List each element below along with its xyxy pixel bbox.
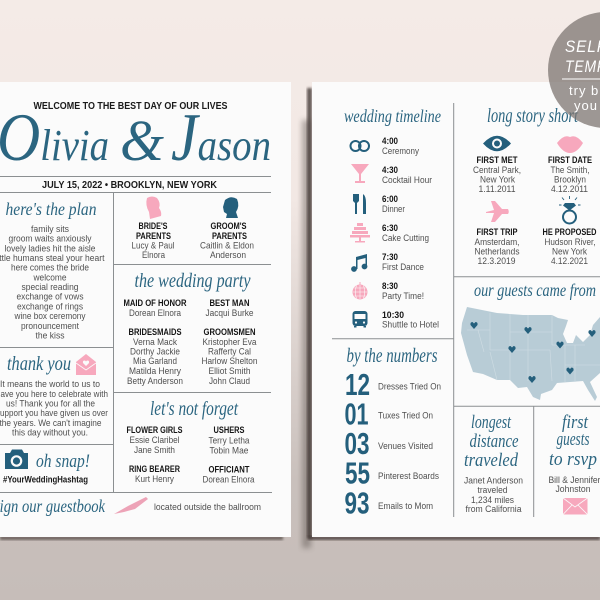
- icon: shuttle bus: [352, 311, 368, 328]
- panel: long story short: 4.12.2021: [551, 256, 588, 267]
- badge: self edit template: try b: [569, 83, 599, 98]
- panel: longest distance traveled: traveled: [478, 485, 508, 496]
- panel: left page: [0, 82, 291, 537]
- panel: by the numbers: [344, 345, 441, 520]
- panel: long story short: FIRST MET: [476, 155, 518, 166]
- panel: let's not forget: Kurt Henry: [135, 474, 174, 485]
- map: United States: [461, 307, 600, 401]
- panel: here's the plan: exchange of vows: [16, 292, 84, 303]
- panel: the wedding party: BRIDESMAIDS: [128, 327, 182, 338]
- panel: long story short: FIRST TRIP: [476, 227, 518, 238]
- panel: parents: Elnora: [142, 250, 166, 261]
- icon: fork and knife: [353, 194, 366, 214]
- panel: first guests to rsvp: to rsvp: [549, 449, 597, 470]
- icon: lips: [557, 136, 583, 153]
- panel: long story short: New York: [552, 246, 587, 258]
- panel: our guests came from: [461, 280, 600, 401]
- panel: by the numbers: 93: [344, 486, 370, 520]
- panel: parents: BRIDE'S: [138, 221, 168, 232]
- panel: thank you: this day without you.: [12, 428, 88, 438]
- panel: right page: [312, 82, 600, 537]
- panel: long story short: [473, 105, 597, 267]
- panel: here's the plan: welcome: [33, 272, 66, 283]
- panel: thank you: [0, 353, 109, 438]
- icon: pink envelope with heart: [76, 354, 96, 375]
- icon: diamond ring: [559, 196, 580, 224]
- panel: wedding timeline: First Dance: [382, 262, 424, 273]
- panel: the wedding party: Mia Garland: [133, 356, 177, 367]
- panel: wedding timeline: 8:30: [382, 281, 398, 292]
- icon: groom silhouette: [223, 197, 238, 218]
- panel: let's not forget: Terry Letha: [208, 436, 250, 446]
- panel: oh snap: oh snap!: [36, 451, 90, 472]
- panel: long story short: 1.11.2011: [478, 184, 516, 195]
- panel: first guests to rsvp: [548, 412, 600, 514]
- badge: self edit template: you: [574, 98, 598, 113]
- panel: the wedding party: Betty Anderson: [127, 376, 183, 387]
- page shadows: [0, 88, 600, 548]
- panel: let's not forget: FLOWER GIRLS: [126, 425, 183, 436]
- panel: let's not forget: [126, 398, 255, 486]
- panel: the wedding party: Elliot Smith: [208, 366, 250, 377]
- panel: longest distance traveled: Janet Anderson: [464, 476, 523, 486]
- panel: parents: PARENTS: [212, 231, 247, 242]
- panel: long story short: The Smith,: [550, 165, 590, 176]
- panel: long story short: Netherlands: [474, 246, 520, 258]
- panel: wedding timeline: wedding timeline: [344, 106, 441, 126]
- panel: long story short: 4.12.2011: [551, 184, 588, 195]
- panel: longest distance traveled: from California: [466, 504, 522, 515]
- panel: the wedding party: Harlow Shelton: [202, 356, 258, 367]
- panel: the wedding party: Rafferty Cal: [208, 347, 251, 358]
- panel: here's the plan: here comes the bride: [11, 263, 89, 274]
- panel: by the numbers: 01: [344, 396, 368, 432]
- panel: thank you: support you have given us over: [0, 408, 109, 419]
- icon: airplane: [486, 201, 509, 222]
- heading: welcome line: WELCOME TO THE BEST DAY OF OUR LIVES: [34, 100, 228, 112]
- panel: parents: PARENTS: [136, 231, 171, 242]
- icon: pen: [114, 497, 148, 514]
- panel: wedding timeline: Cake Cutting: [382, 233, 429, 244]
- panel: thank you: thank you: [7, 353, 71, 375]
- panel: longest distance traveled: distance: [470, 431, 518, 452]
- icon: cocktail: [351, 164, 369, 183]
- panel: here's the plan: groom waits anxiously: [8, 234, 92, 245]
- panel: let's not forget: OFFICIANT: [208, 464, 250, 476]
- panel: wedding timeline: Shuttle to Hotel: [382, 320, 439, 330]
- panel: the wedding party: Dorthy Jackie: [130, 347, 180, 358]
- panel: the wedding party: Dorean Elnora: [129, 308, 182, 319]
- panel: by the numbers: 55: [345, 456, 370, 490]
- icon: eye: [483, 136, 511, 151]
- panel: the wedding party: [124, 270, 258, 387]
- panel: by the numbers: Venues Visited: [378, 441, 433, 452]
- panel: here's the plan: here's the plan: [6, 199, 96, 219]
- icon: envelope: [563, 498, 588, 514]
- panel: by the numbers: Pinterest Boards: [378, 471, 439, 482]
- panel: by the numbers: 12: [345, 367, 370, 402]
- panel: let's not forget: Jane Smith: [134, 445, 175, 456]
- panel: long story short: 12.3.2019: [478, 256, 516, 267]
- title: couple names: &: [120, 108, 164, 173]
- panel: wedding timeline: Ceremony: [382, 146, 419, 157]
- title: couple names: Jason: [171, 99, 271, 175]
- panel: the wedding party: MAID OF HONOR: [124, 298, 187, 309]
- date and location: JULY 15, 2022 • BROOKLYN, NEW YORK: [42, 180, 217, 191]
- panel: longest distance traveled: longest: [471, 412, 512, 433]
- panel: the wedding party: Jacqui Burke: [206, 308, 254, 319]
- panel: long story short: New York: [480, 174, 515, 186]
- panel: wedding timeline: 4:00: [382, 136, 398, 147]
- panel: long story short: Amsterdam,: [474, 237, 520, 248]
- panel: parents: [132, 196, 254, 261]
- icon: music note: [351, 254, 367, 272]
- panel: thank you: the years. We can't imagine: [0, 418, 102, 429]
- panel: here's the plan: lovely ladies hit the aisle: [4, 243, 96, 254]
- panel: wedding timeline: Dinner: [382, 204, 406, 215]
- panel: the wedding party: the wedding party: [134, 270, 251, 292]
- panel: here's the plan: [0, 199, 105, 341]
- panel: here's the plan: family sits: [31, 224, 69, 235]
- panel: oh snap: [3, 450, 90, 486]
- panel: the wedding party: Kristopher Eva: [202, 337, 257, 348]
- panel: the wedding party: John Claud: [209, 376, 250, 387]
- panel: wedding timeline: 10:30: [382, 310, 404, 321]
- panel: parents: GROOM'S: [210, 221, 247, 232]
- panel: longest distance traveled: traveled: [464, 450, 518, 471]
- panel: parents: Anderson: [210, 250, 246, 261]
- panel: by the numbers: 03: [344, 426, 370, 461]
- icon: cake: [350, 223, 370, 242]
- panel: by the numbers: Dresses Tried On: [378, 382, 441, 393]
- panel: here's the plan: pronouncement: [21, 321, 79, 332]
- panel: thank you: us! Thank you for all the: [6, 398, 95, 410]
- panel: wedding timeline: 6:00: [382, 194, 398, 205]
- panel: parents: Lucy & Paul: [132, 240, 174, 252]
- panel: here's the plan: special reading: [22, 282, 78, 293]
- panel: the wedding party: Verna Mack: [133, 337, 177, 348]
- panel: thank you: have you here to celebrate with: [0, 389, 108, 400]
- panel: oh snap: #YourWeddingHashtag: [3, 474, 88, 486]
- panel: here's the plan: wine box ceremony: [14, 311, 86, 322]
- panel: thank you: It means the world to us to: [0, 379, 100, 390]
- panel: first guests to rsvp: first: [562, 412, 589, 433]
- panel: the wedding party: BEST MAN: [210, 298, 250, 309]
- panel: here's the plan: the kiss: [36, 330, 65, 341]
- icon: rings: [350, 141, 369, 151]
- panel: parents: Caitlin & Eldon: [200, 240, 254, 252]
- panel: let's not forget: Dorean Elnora: [202, 474, 255, 486]
- panel: let's not forget: let's not forget: [150, 398, 238, 420]
- panel: let's not forget: RING BEARER: [129, 464, 180, 475]
- title: couple names: [0, 99, 271, 175]
- badge: self edit template: [548, 12, 600, 128]
- panel: longest distance traveled: [464, 412, 523, 515]
- panel: the wedding party: GROOMSMEN: [204, 327, 256, 338]
- panel: by the numbers: Tuxes Tried On: [378, 410, 433, 422]
- map: heart markers: [470, 322, 596, 383]
- panel: wedding timeline: 6:30: [382, 223, 398, 234]
- panel: long story short: Brooklyn: [554, 174, 586, 186]
- panel: wedding timeline: Party Time!: [382, 291, 424, 302]
- panel: here's the plan: exchange of rings: [17, 301, 83, 312]
- panel: by the numbers: by the numbers: [346, 345, 438, 367]
- panel: by the numbers: Emails to Mom: [378, 501, 433, 512]
- panel: longest distance traveled: 1,234 miles: [471, 495, 514, 506]
- panel: let's not forget: Essie Claribel: [130, 435, 180, 446]
- panel: wedding timeline: 4:30: [382, 165, 398, 176]
- panel: let's not forget: USHERS: [214, 425, 245, 436]
- panel: the wedding party: Matilda Henry: [129, 366, 181, 377]
- panel: first guests to rsvp: Johnston: [556, 484, 590, 495]
- icon: disco ball: [352, 282, 368, 300]
- title: couple names: Olivia: [0, 99, 109, 175]
- panel: wedding timeline: Cocktail Hour: [382, 175, 433, 186]
- panel: guestbook: located outside the ballroom: [154, 502, 261, 513]
- panel: wedding timeline: 7:30: [382, 252, 398, 263]
- panel: let's not forget: Tobin Mae: [210, 446, 248, 456]
- panel: guestbook: [0, 496, 261, 516]
- map: state borders: [467, 313, 600, 382]
- panel: wedding timeline: [344, 106, 441, 330]
- panel: long story short: Central Park,: [473, 165, 521, 176]
- icon: camera: [5, 450, 28, 469]
- icon: bride silhouette: [146, 196, 161, 219]
